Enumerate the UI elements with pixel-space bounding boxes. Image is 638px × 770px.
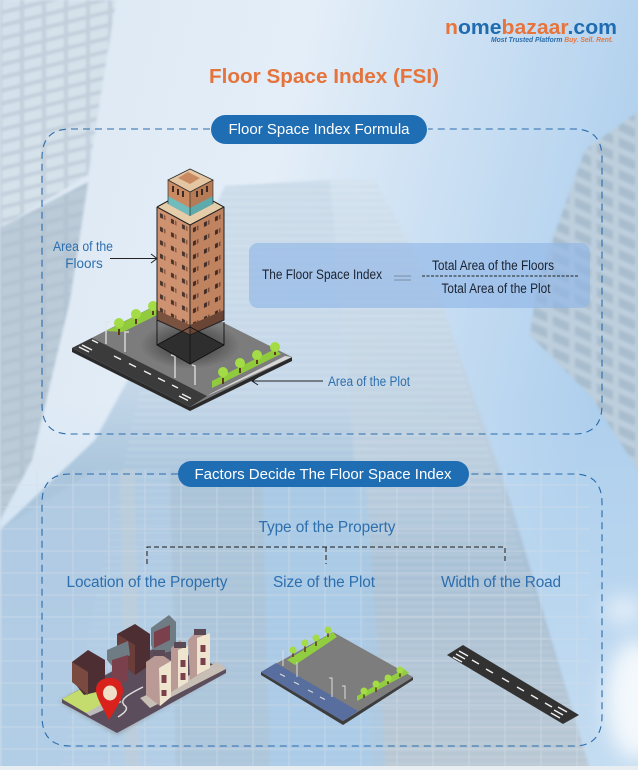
factor: width of the road: Width of the Road — [441, 574, 561, 591]
illustration: road width — [447, 645, 579, 724]
title: Floor Space Index (FSI) — [209, 66, 439, 88]
arrow: to floors — [110, 254, 157, 263]
wire outline at base — [157, 320, 224, 364]
heading: factors pill: Factors Decide The Floor Space Index — [194, 466, 452, 483]
formula left term: The Floor Space Index — [262, 267, 382, 282]
dark houses — [72, 650, 105, 695]
illustration: neighbourhood with location pin — [60, 615, 226, 735]
right skyscraper — [530, 112, 638, 470]
panel: factors outline — [42, 474, 602, 746]
illustration: size of the plot — [261, 626, 413, 725]
logo tagline: Most Trusted Platform Buy. Sell. Rent. — [491, 35, 613, 44]
trees — [114, 301, 280, 384]
pin — [96, 678, 123, 720]
logo — [445, 16, 617, 44]
label: area of the floors: Floors — [65, 256, 103, 271]
street lamps — [106, 322, 195, 385]
arrow: to plot — [252, 377, 323, 385]
heading: formula pill — [211, 115, 427, 144]
factor: size of the plot: Size of the Plot — [273, 574, 376, 591]
lighter window bands low on tower — [0, 470, 176, 770]
label: area of the floors: Area of the — [53, 239, 113, 254]
tower — [157, 169, 224, 364]
central skyscraper silhouette — [0, 180, 372, 770]
label: area of the plot: Area of the Plot — [328, 374, 410, 389]
heading: factors pill — [178, 461, 469, 487]
central tower right face — [330, 180, 590, 770]
denominator: Total Area of the Plot — [442, 281, 551, 296]
road dashes — [79, 340, 191, 400]
connector: factor tree — [147, 547, 505, 564]
clouds — [604, 596, 638, 760]
numerator: Total Area of the Floors — [432, 258, 554, 273]
heading: formula pill: Floor Space Index Formula — [228, 121, 410, 138]
factor: location of the property: Location of the Property — [66, 574, 228, 591]
equals sign — [394, 276, 411, 280]
plot — [72, 297, 292, 411]
panel: formula outline — [42, 129, 602, 434]
illustration: building on plot — [72, 169, 292, 411]
fraction line — [422, 275, 578, 277]
apartment blocks — [146, 653, 171, 706]
label: area of the floors — [53, 239, 113, 271]
factor: type of the property: Type of the Property — [258, 519, 396, 536]
logo wordmark: nomebazaar.com — [445, 16, 617, 39]
formula box — [249, 243, 590, 308]
left skyscraper — [0, 0, 116, 228]
